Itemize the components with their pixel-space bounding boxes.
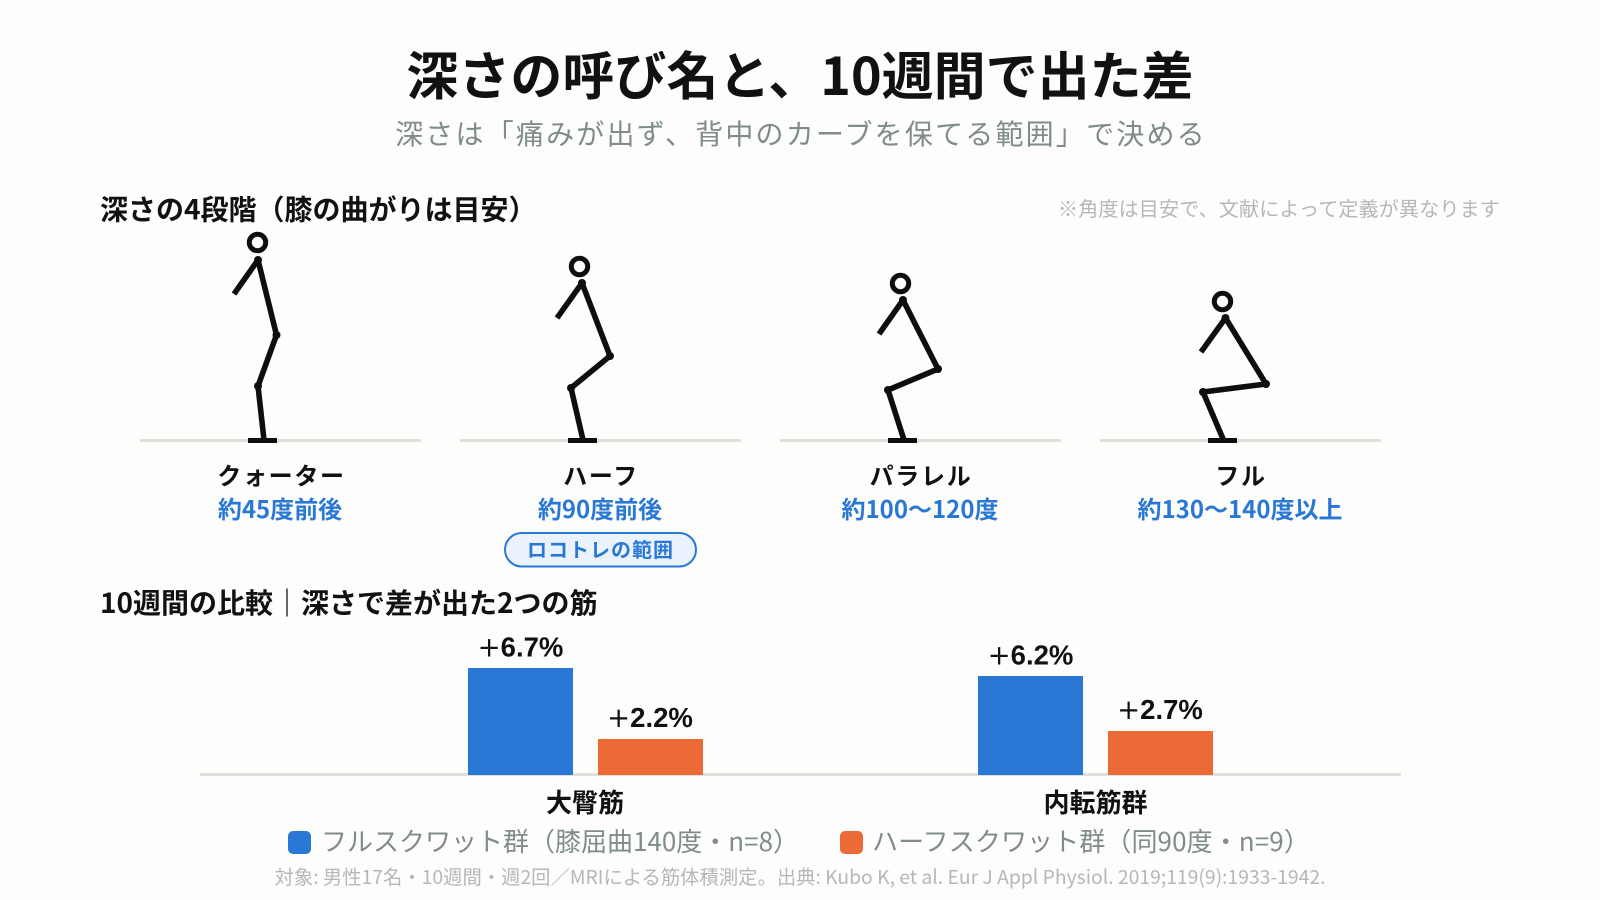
icon: quarter squat figure <box>234 234 280 443</box>
heading: ten-week comparison: 10週間の比較｜深さで差が出た2つの筋 <box>100 582 598 622</box>
bar group: adductors: 内転筋群 <box>1043 783 1148 820</box>
bar group: gluteus maximus: +2.2% <box>607 702 693 734</box>
bar group: gluteus maximus: +6.7% <box>478 632 563 664</box>
bar group: gluteus maximus <box>468 632 703 820</box>
legend <box>288 822 1310 859</box>
icon: parallel squat figure <box>879 275 942 443</box>
bar group: adductors: +2.7% <box>1117 694 1203 726</box>
callout: locomotion training range: ロコトレの範囲 <box>527 534 674 563</box>
panel: quarter squat <box>140 234 421 525</box>
bar group: adductors: +6.2% <box>988 640 1073 672</box>
title: 深さの呼び名と、10週間で出た差 <box>406 35 1194 110</box>
source footnote: 対象: 男性17名・10週間・週2回／MRIによる筋体積測定。出典: Kubo K, et al. Eur J Appl Physiol. 2019;119(9):1933-1942. <box>275 862 1325 890</box>
panel: full squat <box>1100 293 1381 525</box>
panel: full squat: 約130〜140度以上 <box>1138 490 1342 525</box>
bar chart: muscle volume change <box>200 632 1401 820</box>
note: angle definition: ※角度は目安で、文献によって定義が異なります <box>1058 193 1500 222</box>
subtitle: 深さは「痛みが出ず、背中のカーブを保てる範囲」で決める <box>395 113 1207 153</box>
panel: half squat <box>460 258 741 566</box>
icon: half squat figure <box>557 258 614 443</box>
bar group: gluteus maximus: 大臀筋 <box>546 783 624 820</box>
panel: parallel squat: パラレル <box>870 456 972 492</box>
panel: half squat: ハーフ <box>563 456 639 492</box>
panel: quarter squat: 約45度前後 <box>218 490 342 525</box>
panel: half squat: 約90度前後 <box>538 490 662 525</box>
panel: parallel squat: 約100〜120度 <box>842 490 998 525</box>
panel: parallel squat <box>780 275 1061 525</box>
heading: four depth stages: 深さの4段階（膝の曲がりは目安） <box>100 188 537 228</box>
legend: ハーフスクワット群（同90度・n=9） <box>872 822 1310 859</box>
icon: full squat figure <box>1199 293 1270 443</box>
legend: フルスクワット群（膝屈曲140度・n=8） <box>321 822 799 859</box>
bar group: adductors <box>978 640 1213 820</box>
panel: quarter squat: クォーター <box>217 456 346 492</box>
panel: full squat: フル <box>1215 456 1267 492</box>
callout: locomotion training range <box>505 533 696 566</box>
